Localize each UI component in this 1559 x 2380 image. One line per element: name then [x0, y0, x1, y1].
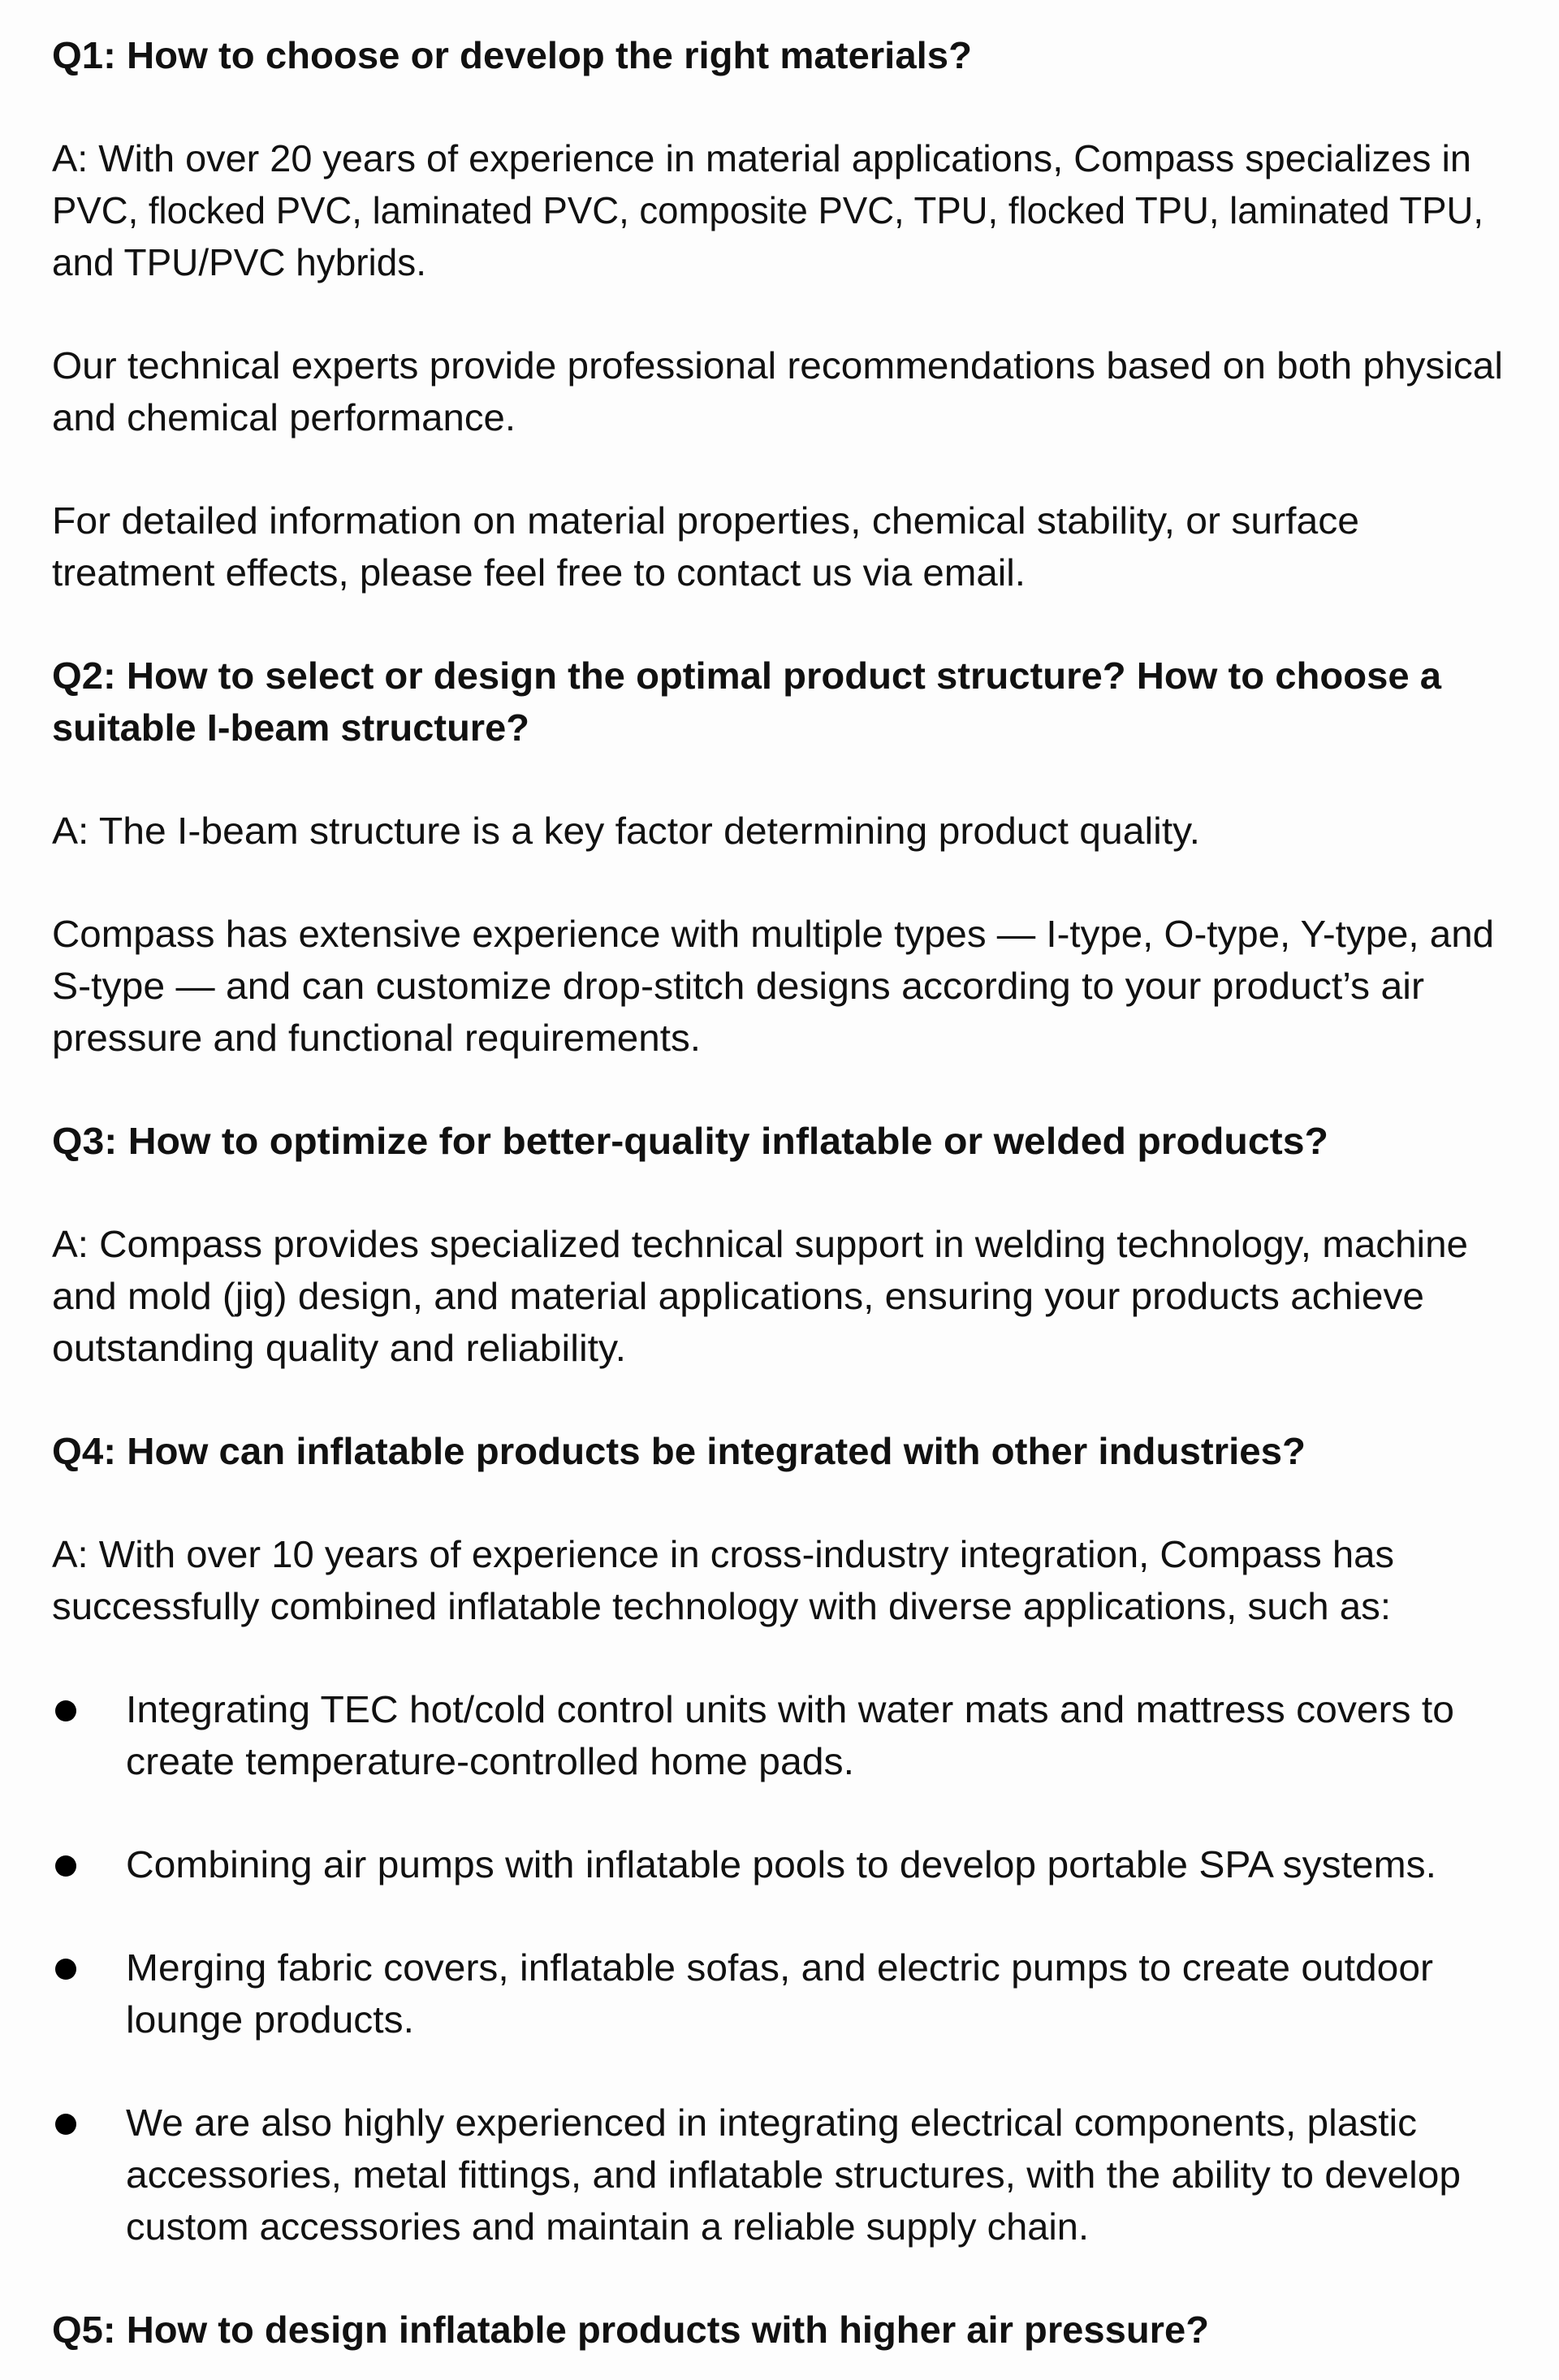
- bullet item 4: custom accessories and maintain a reliable supply chain.: [126, 2205, 1089, 2248]
- text block: Q2 answer paragraph 2: S-type — and can customize drop-stitch designs according to your product’s air: [52, 965, 1424, 1007]
- bullet item 3: [55, 1946, 1433, 2041]
- bullet item 2: Combining air pumps with inflatable pools to develop portable SPA systems.: [126, 1843, 1436, 1885]
- heading: Q2: [52, 654, 1441, 749]
- text block: Q1 answer paragraph 3: treatment effects, please feel free to contact us via email.: [52, 551, 1026, 594]
- bullet item 4: accessories, metal fittings, and inflatable structures, with the ability to develop: [126, 2153, 1461, 2196]
- heading: Q4: Q4: How can inflatable products be integrated with other industries?: [52, 1430, 1306, 1472]
- text block: Q2 answer paragraph 1: A: The I-beam structure is a key factor determining product quality.: [52, 810, 1200, 852]
- text block: Q1 answer paragraph 3: For detailed information on material properties, chemical stability, or surface: [52, 499, 1359, 542]
- text block: Q1 answer paragraph 2: and chemical performance.: [52, 396, 516, 438]
- bullet item 4: We are also highly experienced in integrating electrical components, plastic: [126, 2101, 1417, 2144]
- text block: Q1 answer paragraph 3: [52, 499, 1359, 594]
- heading: Q2: suitable I-beam structure?: [52, 706, 529, 749]
- text block: Q3 answer: and mold (jig) design, and material applications, ensuring your products achieve: [52, 1275, 1424, 1317]
- heading: Q3: Q3: How to optimize for better-quality inflatable or welded products?: [52, 1120, 1328, 1162]
- bullet item 1: create temperature-controlled home pads.: [126, 1740, 854, 1782]
- bullet item 1: Integrating TEC hot/cold control units with water mats and mattress covers to: [126, 1688, 1454, 1730]
- bullet item 4: [55, 2101, 1461, 2248]
- text block: Q1 answer paragraph 2: Our technical experts provide professional recommendations based on both physical: [52, 344, 1503, 387]
- text block: Q2 answer paragraph 2: pressure and functional requirements.: [52, 1017, 701, 1059]
- text block: Q1 answer paragraph 1: [52, 137, 1483, 283]
- bullet item 1: [55, 1688, 1454, 1782]
- text block: Q1 answer paragraph 2: [52, 344, 1503, 438]
- text block: Q1 answer paragraph 1: PVC, flocked PVC, laminated PVC, composite PVC, TPU, flocked TPU, laminated TPU,: [52, 189, 1483, 231]
- bullet list: [55, 1688, 1461, 2248]
- text block: Q3 answer: outstanding quality and reliability.: [52, 1327, 626, 1369]
- text block: Q3 answer: A: Compass provides specialized technical support in welding technology, machine: [52, 1223, 1468, 1265]
- bullet item 3: lounge products.: [126, 1998, 414, 2041]
- heading: Q1: Q1: How to choose or develop the right materials?: [52, 34, 972, 76]
- heading: Q5: Q5: How to design inflatable products with higher air pressure?: [52, 2309, 1209, 2351]
- text block: Q2 answer paragraph 2: [52, 913, 1494, 1059]
- text block: Q1 answer paragraph 1: A: With over 20 years of experience in material applications, Compass specializes in: [52, 137, 1471, 179]
- text block: Q1 answer paragraph 1: and TPU/PVC hybrids.: [52, 241, 426, 283]
- text block: Q4 answer intro: A: With over 10 years of experience in cross-industry integration, Compass has: [52, 1533, 1394, 1575]
- text block: Q4 answer intro: [52, 1533, 1394, 1627]
- bullet item 3: Merging fabric covers, inflatable sofas, and electric pumps to create outdoor: [126, 1946, 1433, 1989]
- text block: Q2 answer paragraph 2: Compass has extensive experience with multiple types — I-type, O-type, Y-type, and: [52, 913, 1494, 955]
- heading: Q2: Q2: How to select or design the optimal product structure? How to choose a: [52, 654, 1441, 697]
- text block: Q4 answer intro: successfully combined inflatable technology with diverse applications, such as:: [52, 1585, 1391, 1627]
- text block: Q3 answer: [52, 1223, 1468, 1369]
